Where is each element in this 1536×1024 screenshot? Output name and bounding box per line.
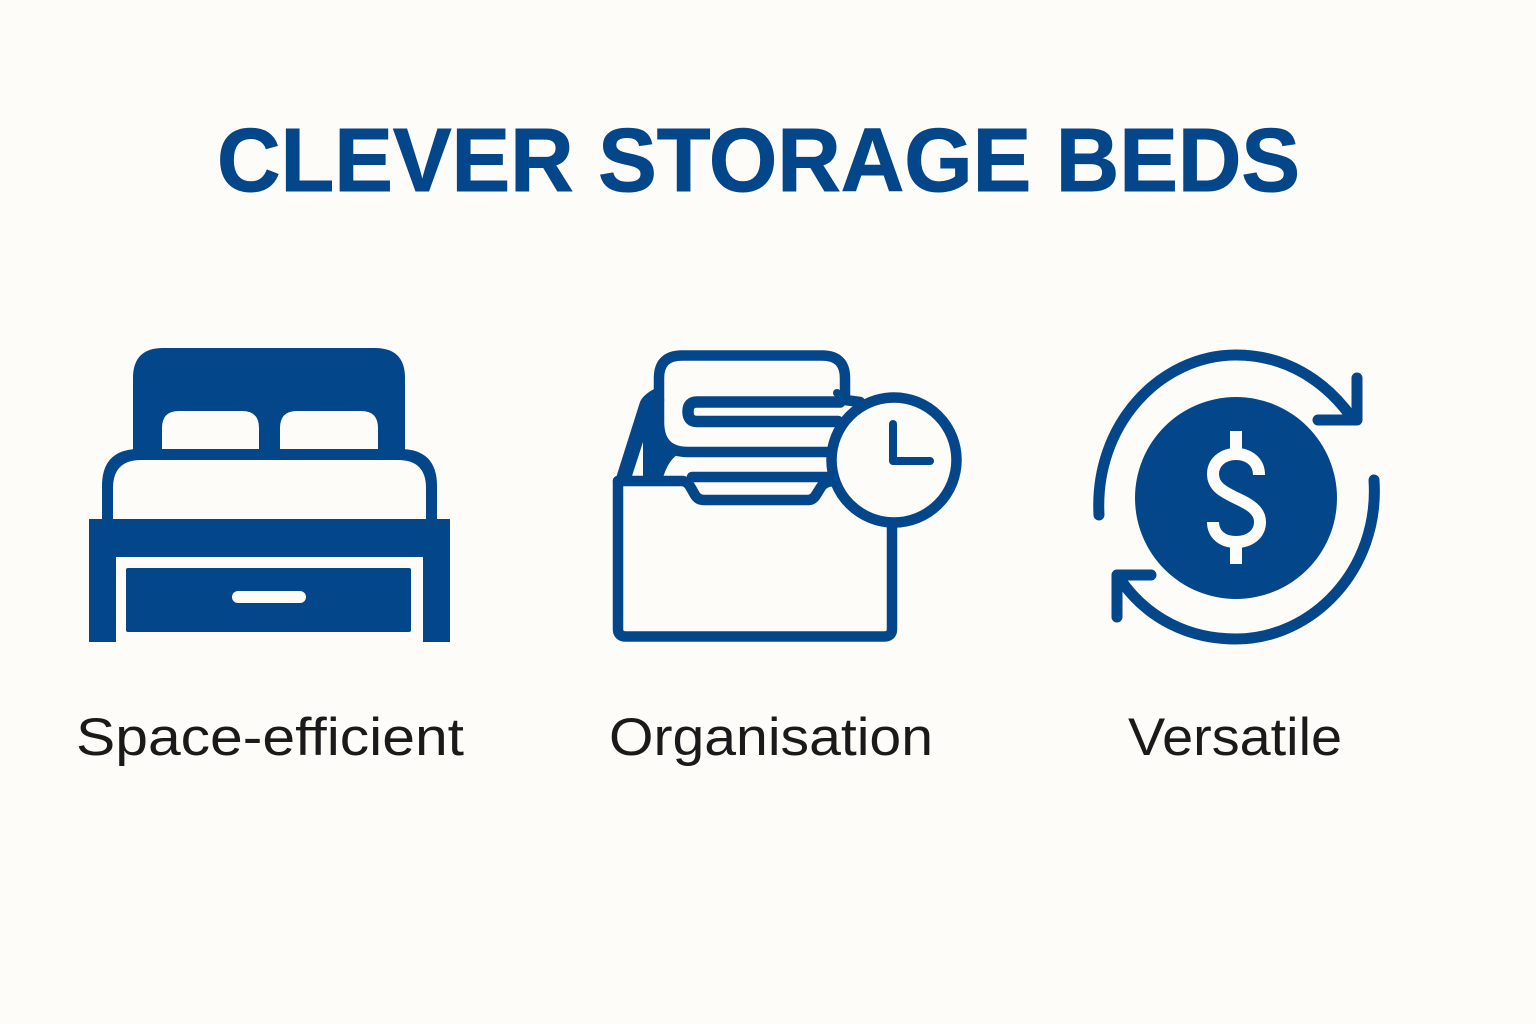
- label: versatile: Versatile: [1128, 708, 1342, 767]
- panel: space-efficient: [76, 348, 464, 767]
- icon: folder with documents and clock: [615, 356, 956, 636]
- panel: versatile: [1099, 355, 1374, 767]
- label: space-efficient: Space-efficient: [76, 708, 464, 767]
- label: organisation: Organisation: [609, 708, 933, 767]
- title: CLEVER STORAGE BEDS: [217, 111, 1300, 211]
- icon: bed with storage drawer: [89, 348, 450, 642]
- icon: dollar coin with circular arrows: [1099, 355, 1374, 639]
- panel: organisation: [609, 356, 956, 767]
